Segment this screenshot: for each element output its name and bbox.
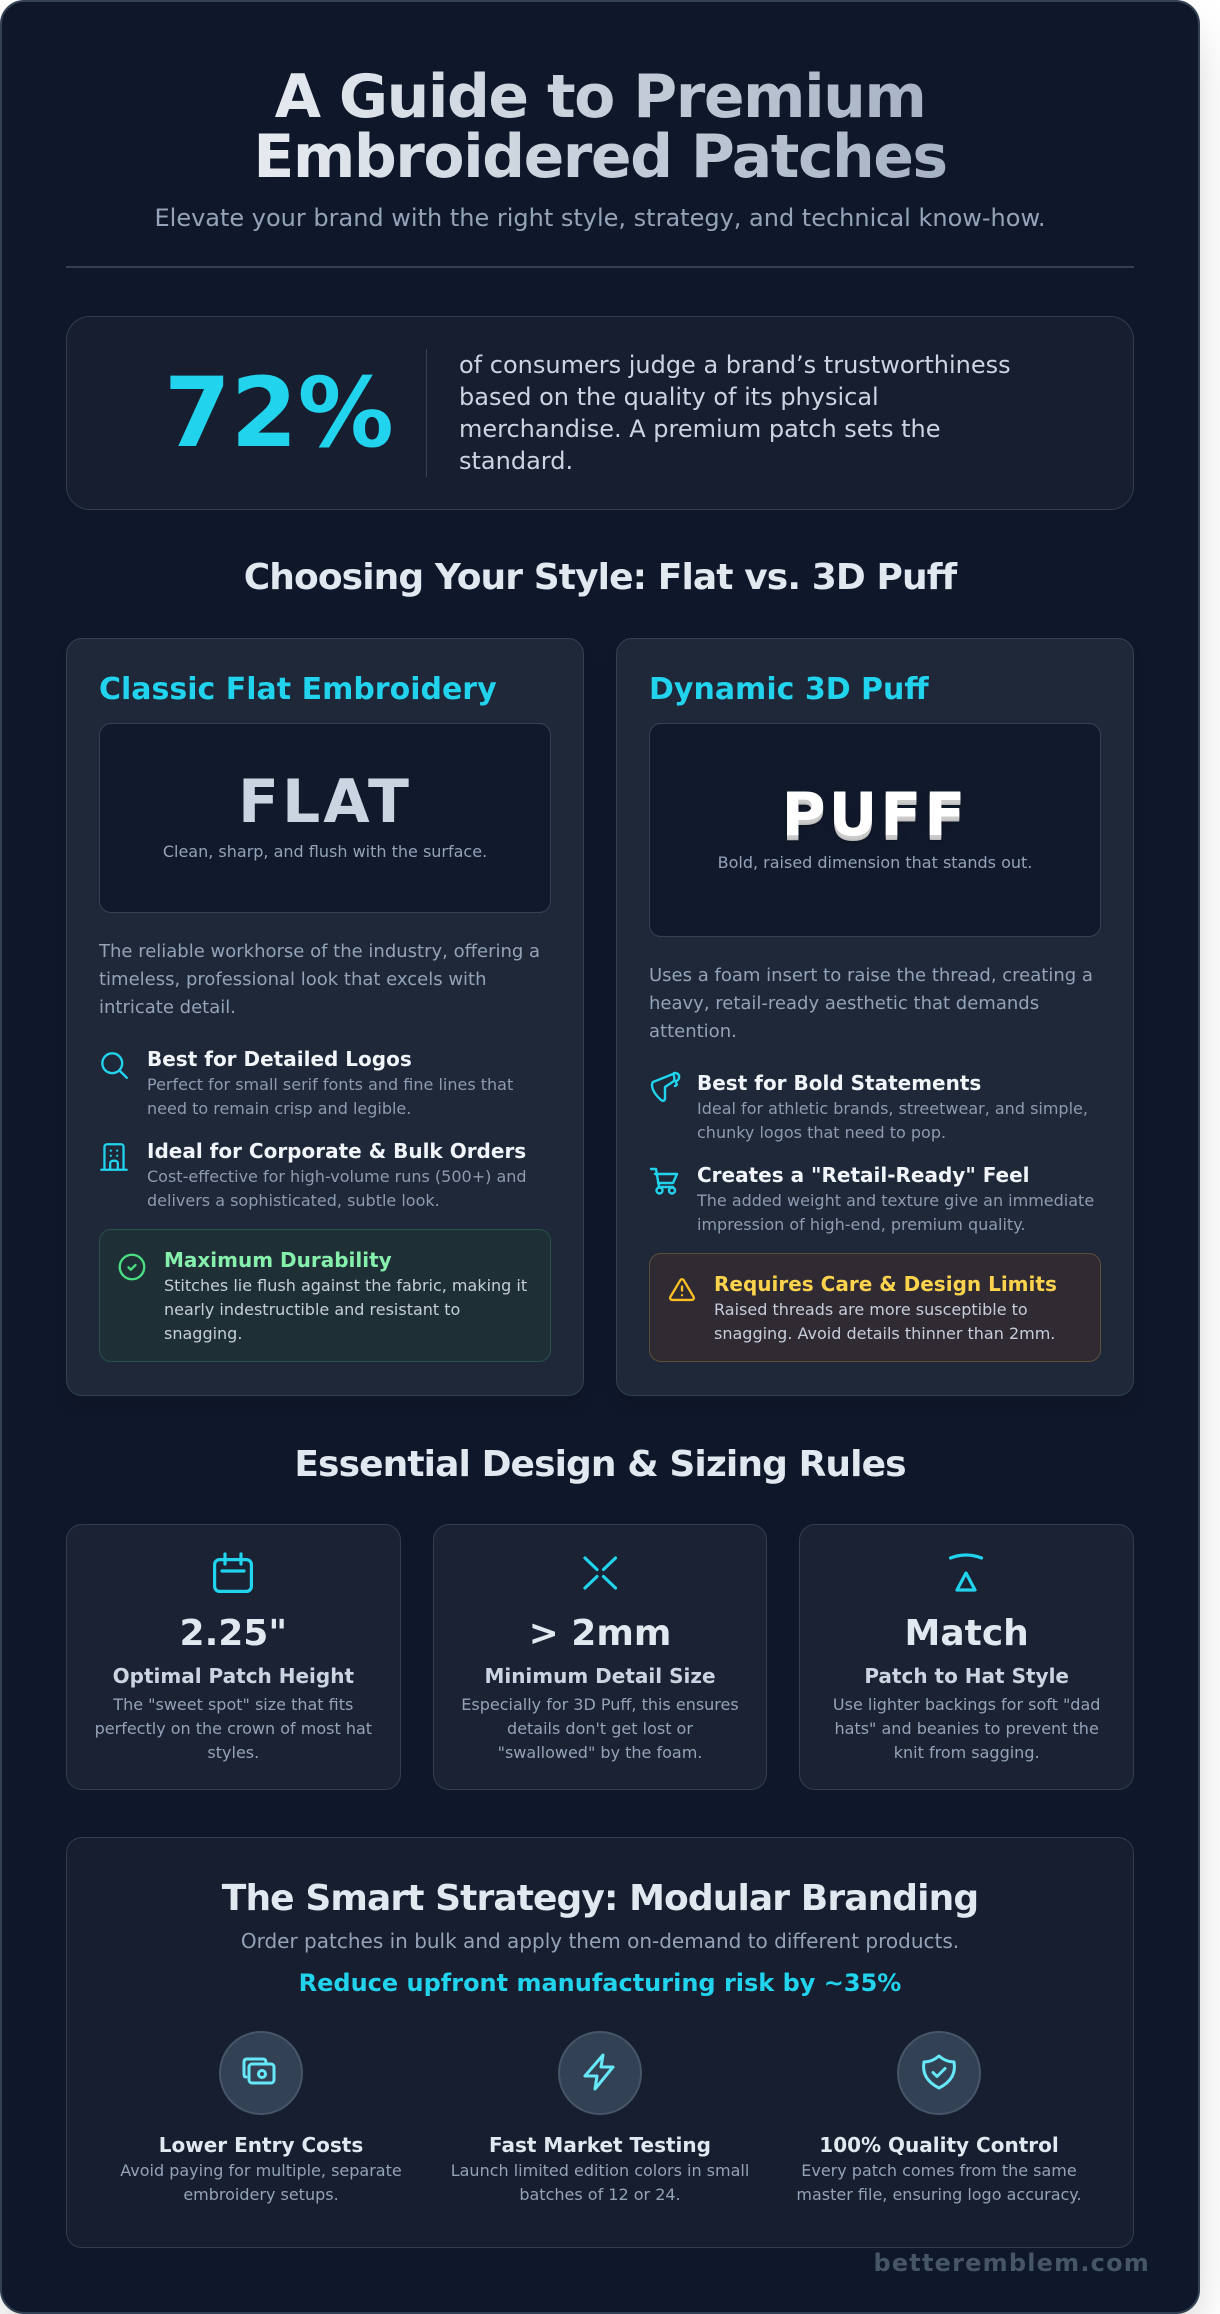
item: bold statements — [650, 1071, 1088, 1142]
panel: patch height rule — [66, 1524, 401, 1790]
flat description: The reliable workhorse of the industry, offering a — [99, 941, 540, 962]
item: corporate orders: Ideal for Corporate & Bulk Orders — [147, 1139, 526, 1163]
callout: maximum durability: Stitches lie flush against the fabric, making it — [164, 1276, 527, 1294]
panel: dynamic 3d puff — [616, 638, 1134, 1396]
item: detailed logos: Perfect for small serif fonts and fine lines that — [147, 1074, 513, 1094]
benefit: lower entry costs: Avoid paying for multiple, separate — [120, 2160, 402, 2180]
puff sample word: PUFF — [782, 780, 968, 850]
benefit: fast market testing: Launch limited edition colors in small — [451, 2160, 749, 2180]
panel: key statistic — [66, 316, 1134, 510]
callout: maximum durability: nearly indestructible and resistant to — [164, 1300, 460, 1318]
puff visual — [649, 723, 1101, 937]
item: bold statements: chunky logos that need to pop. — [697, 1122, 946, 1142]
panel: match hat style rule: knit from sagging. — [894, 1743, 1040, 1762]
icon: warning triangle — [668, 1278, 695, 1302]
icon: magnifier — [101, 1052, 128, 1080]
benefit: lower entry costs: Lower Entry Costs — [159, 2133, 363, 2157]
icon: check circle — [118, 1254, 146, 1280]
icon: calendar — [213, 1552, 253, 1593]
panel: minimum detail rule: Especially for 3D Puff, this ensures — [461, 1695, 739, 1714]
benefit: quality control — [796, 2031, 1082, 2204]
flat description: intricate detail. — [99, 997, 236, 1018]
heading: choosing your style: Choosing Your Style: Flat vs. 3D Puff — [244, 557, 956, 598]
callout: requires care: snagging. Avoid details thinner than 2mm. — [714, 1324, 1055, 1342]
puff caption: Bold, raised dimension that stands out. — [718, 853, 1032, 872]
item: corporate orders: Cost-effective for high-volume runs (500+) and — [147, 1166, 527, 1186]
panel: match hat style rule — [799, 1524, 1134, 1790]
callout: requires care: Requires Care & Design Limits — [714, 1272, 1057, 1296]
icon: building — [100, 1143, 128, 1171]
item: detailed logos: Best for Detailed Logos — [147, 1047, 412, 1071]
benefit: fast market testing: Fast Market Testing — [489, 2133, 711, 2157]
panel: match hat style rule: Match — [904, 1613, 1029, 1654]
item: detailed logos — [101, 1047, 513, 1118]
statistic number: 72% — [164, 357, 394, 469]
benefit: quality control: 100% Quality Control — [819, 2133, 1059, 2157]
benefit: lower entry costs — [120, 2031, 402, 2204]
panel: smart strategy — [66, 1837, 1134, 2248]
benefit: fast market testing — [451, 2031, 749, 2204]
item: retail-ready feel: The added weight and texture give an immediate — [697, 1190, 1094, 1210]
panel: patch height rule: styles. — [207, 1743, 259, 1762]
panel: match hat style rule: Use lighter backings for soft "dad — [833, 1695, 1100, 1714]
panel: minimum detail rule — [433, 1524, 767, 1790]
panel: classic flat embroidery — [66, 638, 584, 1396]
panel: minimum detail rule: "swallowed" by the foam. — [498, 1743, 702, 1762]
icon: money stack — [219, 2031, 303, 2115]
title: A Guide to Premium — [275, 62, 925, 132]
icon: lightning bolt — [558, 2031, 642, 2115]
callout: requires care — [649, 1253, 1101, 1362]
statistic text: of consumers judge a brand’s trustworthiness — [459, 351, 1011, 379]
puff description — [649, 965, 1093, 1042]
strategy highlight: Reduce upfront manufacturing risk by ~35% — [299, 1969, 901, 1997]
flat description: timeless, professional look that excels with — [99, 969, 487, 990]
puff description: Uses a foam insert to raise the thread, creating a — [649, 965, 1093, 986]
subtitle: Elevate your brand with the right style, strategy, and technical know-how. — [154, 204, 1046, 232]
icon: shield check — [897, 2031, 981, 2115]
flat caption: Clean, sharp, and flush with the surface. — [163, 842, 487, 861]
panel: match hat style rule: hats" and beanies to prevent the — [834, 1719, 1099, 1738]
item: corporate orders: delivers a sophisticated, subtle look. — [147, 1190, 440, 1210]
item: retail-ready feel: Creates a "Retail-Ready" Feel — [697, 1163, 1030, 1187]
statistic text: standard. — [459, 447, 573, 475]
callout: maximum durability: snagging. — [164, 1324, 242, 1342]
panel: match hat style rule: Patch to Hat Style — [864, 1664, 1069, 1688]
item: retail-ready feel — [650, 1163, 1094, 1234]
heading: design rules: Essential Design & Sizing Rules — [294, 1444, 906, 1484]
title — [66, 67, 1134, 187]
flat sample word: FLAT — [238, 767, 412, 837]
puff description: heavy, retail-ready aesthetic that demands — [649, 993, 1039, 1014]
card title: Dynamic 3D Puff — [649, 672, 929, 706]
icon: hat arc and triangle — [948, 1553, 984, 1592]
icon: shopping cart — [650, 1168, 678, 1195]
flat description — [98, 941, 540, 1018]
benefit: quality control: master file, ensuring logo accuracy. — [796, 2184, 1082, 2204]
flat visual — [99, 723, 551, 913]
callout: maximum durability: Maximum Durability — [164, 1248, 392, 1272]
card title: Classic Flat Embroidery — [99, 672, 497, 706]
panel: patch height rule: perfectly on the crown of most hat — [95, 1719, 372, 1738]
strategy text: Order patches in bulk and apply them on-demand to different products. — [241, 1929, 959, 1953]
statistic text: based on the quality of its physical — [459, 383, 879, 411]
puff description: attention. — [649, 1021, 737, 1042]
benefit: lower entry costs: embroidery setups. — [183, 2184, 339, 2204]
item: corporate orders — [100, 1139, 527, 1210]
statistic text: merchandise. A premium patch sets the — [459, 415, 940, 443]
watermark: betteremblem.com — [873, 2249, 1150, 2277]
panel: patch height rule: 2.25" — [180, 1613, 287, 1654]
panel: minimum detail rule: Minimum Detail Size — [484, 1664, 716, 1688]
callout: maximum durability — [99, 1229, 551, 1362]
title: Embroidered Patches — [253, 122, 947, 192]
benefit: fast market testing: batches of 12 or 24. — [519, 2184, 681, 2204]
callout: requires care: Raised threads are more susceptible to — [714, 1300, 1028, 1318]
item: bold statements: Ideal for athletic brands, streetwear, and simple, — [697, 1098, 1088, 1118]
panel: patch height rule: Optimal Patch Height — [113, 1664, 354, 1688]
icon: megaphone — [650, 1072, 680, 1102]
panel: minimum detail rule: > 2mm — [529, 1613, 671, 1654]
benefit: quality control: Every patch comes from the same — [801, 2160, 1077, 2180]
item: bold statements: Best for Bold Statements — [697, 1071, 981, 1095]
item: detailed logos: need to remain crisp and legible. — [147, 1098, 411, 1118]
strategy heading: The Smart Strategy: Modular Branding — [222, 1878, 978, 1919]
statistic text — [459, 351, 1011, 475]
item: retail-ready feel: impression of high-end, premium quality. — [697, 1214, 1025, 1234]
panel: minimum detail rule: details don't get lost or — [507, 1719, 693, 1738]
panel: patch height rule: The "sweet spot" size that fits — [113, 1695, 353, 1714]
icon: arrows converging — [583, 1556, 618, 1590]
